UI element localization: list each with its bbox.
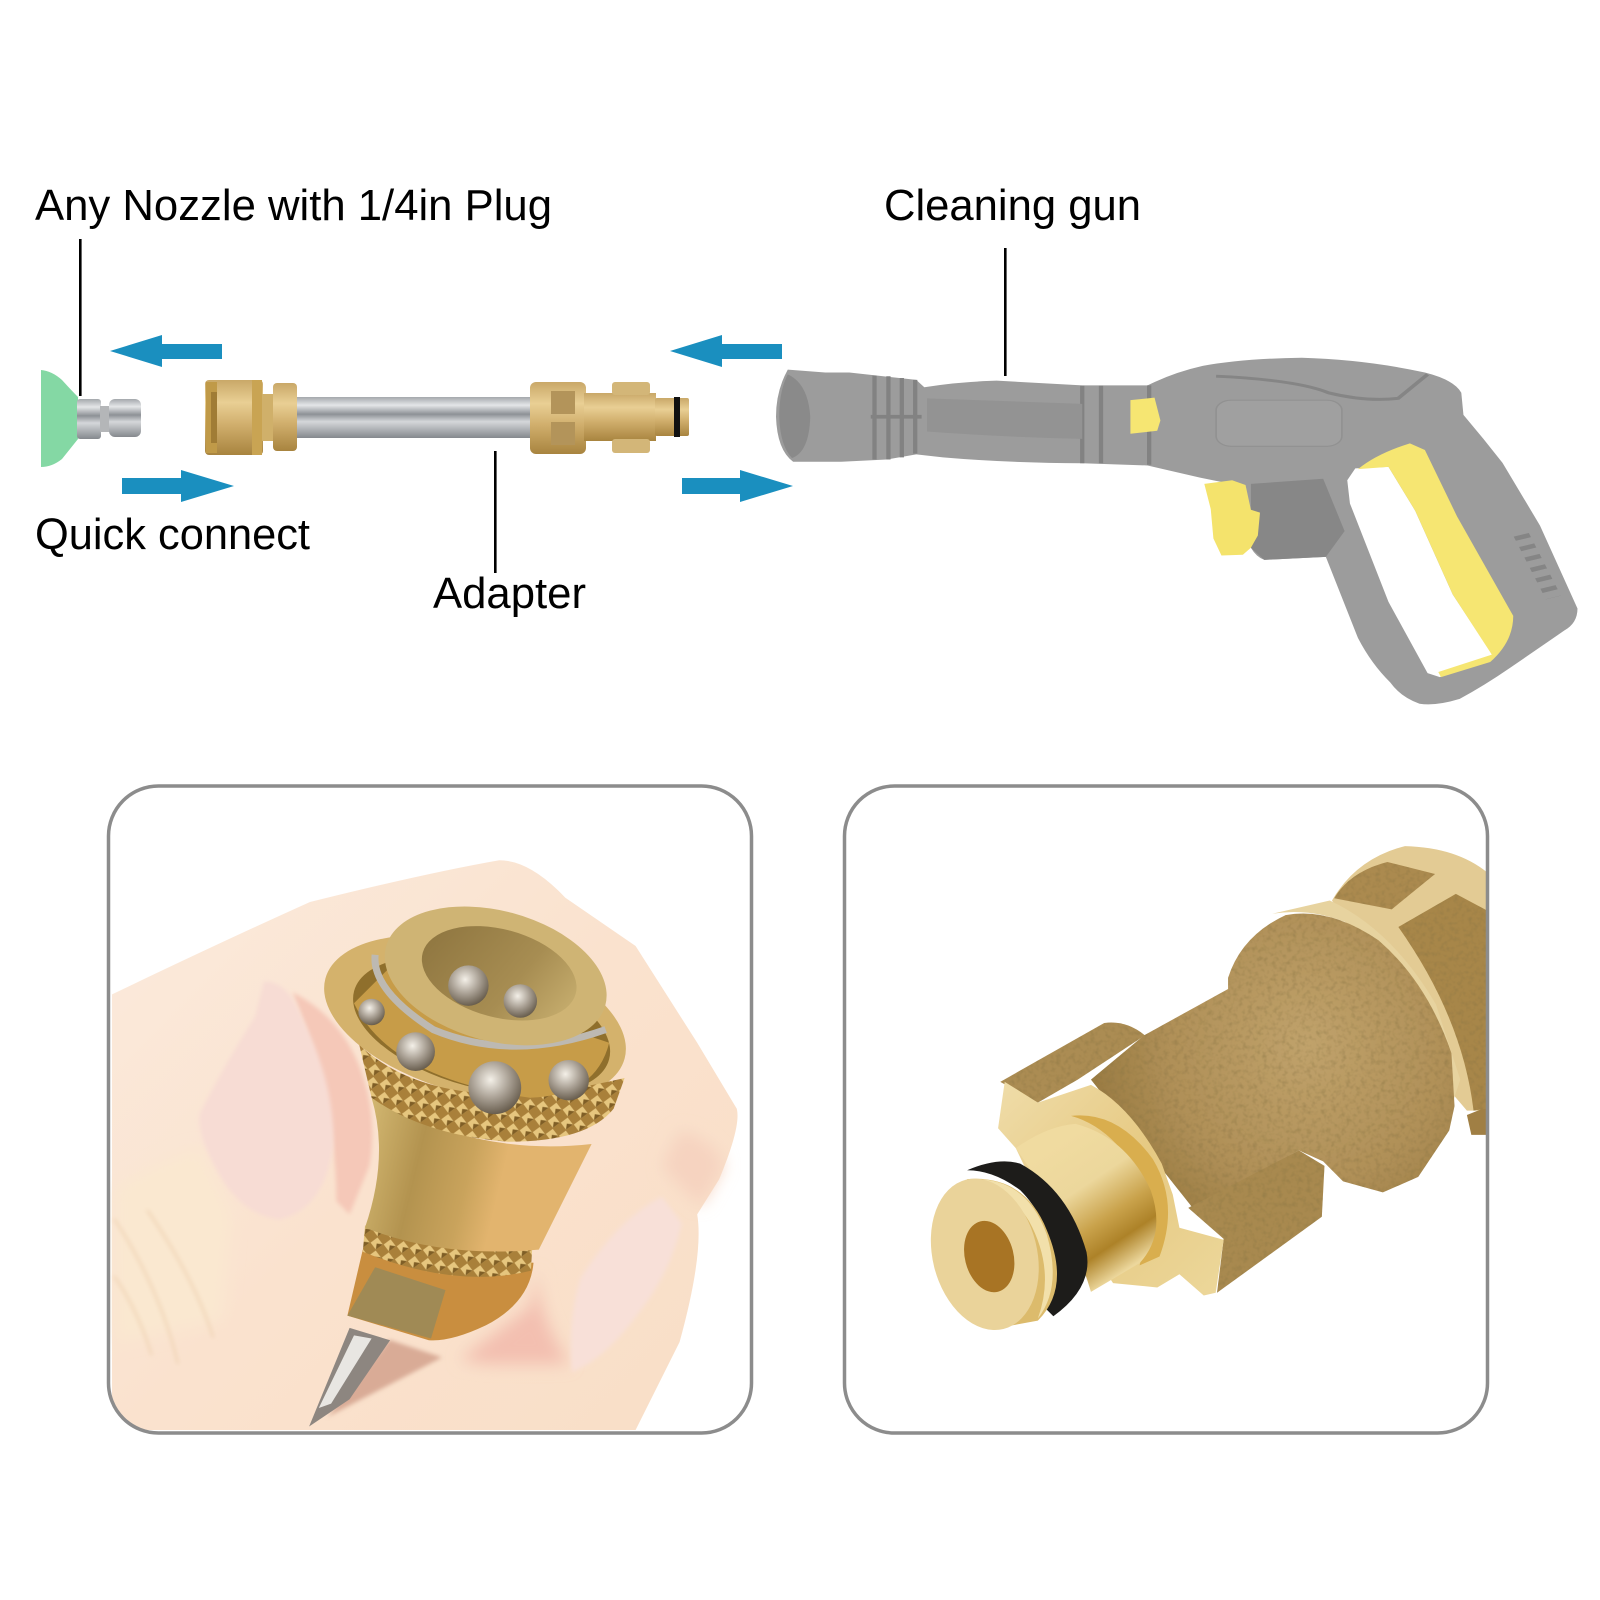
gun ribs (871, 375, 1149, 465)
label: Adapter: Adapter (433, 569, 586, 618)
upper knurl band (359, 1045, 625, 1142)
hand (112, 860, 738, 1430)
upper lug (1000, 1022, 1145, 1103)
arrow: right toward gun (682, 470, 793, 502)
icon: green nozzle (41, 370, 141, 467)
icon: cleaning gun (776, 358, 1577, 704)
flange band (1272, 900, 1460, 1106)
back flange tail (1466, 1108, 1486, 1135)
front piston ring (385, 906, 607, 1046)
yellow lock button (1130, 398, 1160, 434)
gun front opening (779, 374, 810, 458)
piston bore (422, 926, 576, 1020)
thumb nail (199, 981, 333, 1220)
gun body (776, 358, 1577, 704)
leader line: adapter (494, 451, 497, 573)
brass lower cone (347, 1250, 534, 1340)
lower lug (1188, 1150, 1324, 1293)
cast body (1091, 914, 1455, 1208)
panel background (844, 786, 1488, 1433)
panel background (108, 786, 752, 1433)
steel balls (358, 999, 589, 1114)
icon: brass adapter with tube (205, 380, 689, 455)
quick coupler (205, 380, 297, 455)
gun barrel shade (927, 398, 1082, 439)
thumb creases (114, 1210, 213, 1364)
back flange recess 1 (1334, 862, 1435, 909)
grip opening (1347, 467, 1492, 677)
leader line: cleaning gun (1004, 248, 1007, 376)
yellow trigger (1204, 480, 1260, 555)
tip face (916, 1167, 1054, 1342)
leader line: nozzle (79, 239, 82, 396)
steel stem (309, 1328, 390, 1426)
nozzle steel plug (77, 399, 141, 439)
panel border (108, 786, 752, 1433)
back flange recess 2 (1398, 894, 1489, 1111)
ball cage (354, 959, 609, 1098)
gun top ridge (1216, 374, 1428, 399)
label: Any Nozzle with 1/4in Plug: Any Nozzle with 1/4in Plug (35, 181, 552, 230)
adapter body (530, 382, 689, 454)
panel: adapter close-up (844, 786, 1489, 1433)
label: Quick connect: Quick connect (35, 510, 310, 559)
thumb pink edge (292, 992, 372, 1214)
label: Cleaning gun: Cleaning gun (884, 181, 1141, 230)
lower knurl band (363, 1225, 532, 1277)
tip hole (957, 1215, 1022, 1298)
silver ring (375, 955, 606, 1046)
skin shading (116, 1131, 724, 1364)
tip highlight (976, 1179, 1053, 1318)
hex nut (347, 1267, 446, 1338)
panel border (844, 786, 1488, 1433)
arrow: right from nozzle (122, 470, 234, 502)
back flange (1332, 846, 1489, 1111)
front face (998, 1082, 1224, 1295)
brass body (365, 1098, 592, 1252)
panel: quick connect held in hand (108, 786, 752, 1433)
yellow grip insert (1358, 443, 1513, 677)
arrow: left toward adapter (670, 335, 782, 367)
right finger nail (571, 1197, 682, 1372)
collar rim (324, 937, 626, 1092)
trigger housing (1251, 479, 1345, 560)
photo: brass adapter (916, 846, 1489, 1342)
stem shadow (328, 1340, 442, 1417)
grip texture (1521, 535, 1553, 597)
photo: hand and coupler (112, 860, 738, 1430)
bore balls (448, 965, 537, 1018)
nozzle green tip (41, 370, 78, 467)
nose flange (1071, 1115, 1168, 1265)
arrow: left toward nozzle (110, 335, 222, 367)
tip side (967, 1179, 1057, 1330)
steel tube (294, 397, 544, 438)
collar inner cavity (353, 963, 610, 1086)
nose cylinder (1016, 1124, 1156, 1292)
gun side panel (1216, 400, 1342, 446)
o-ring (967, 1161, 1087, 1316)
